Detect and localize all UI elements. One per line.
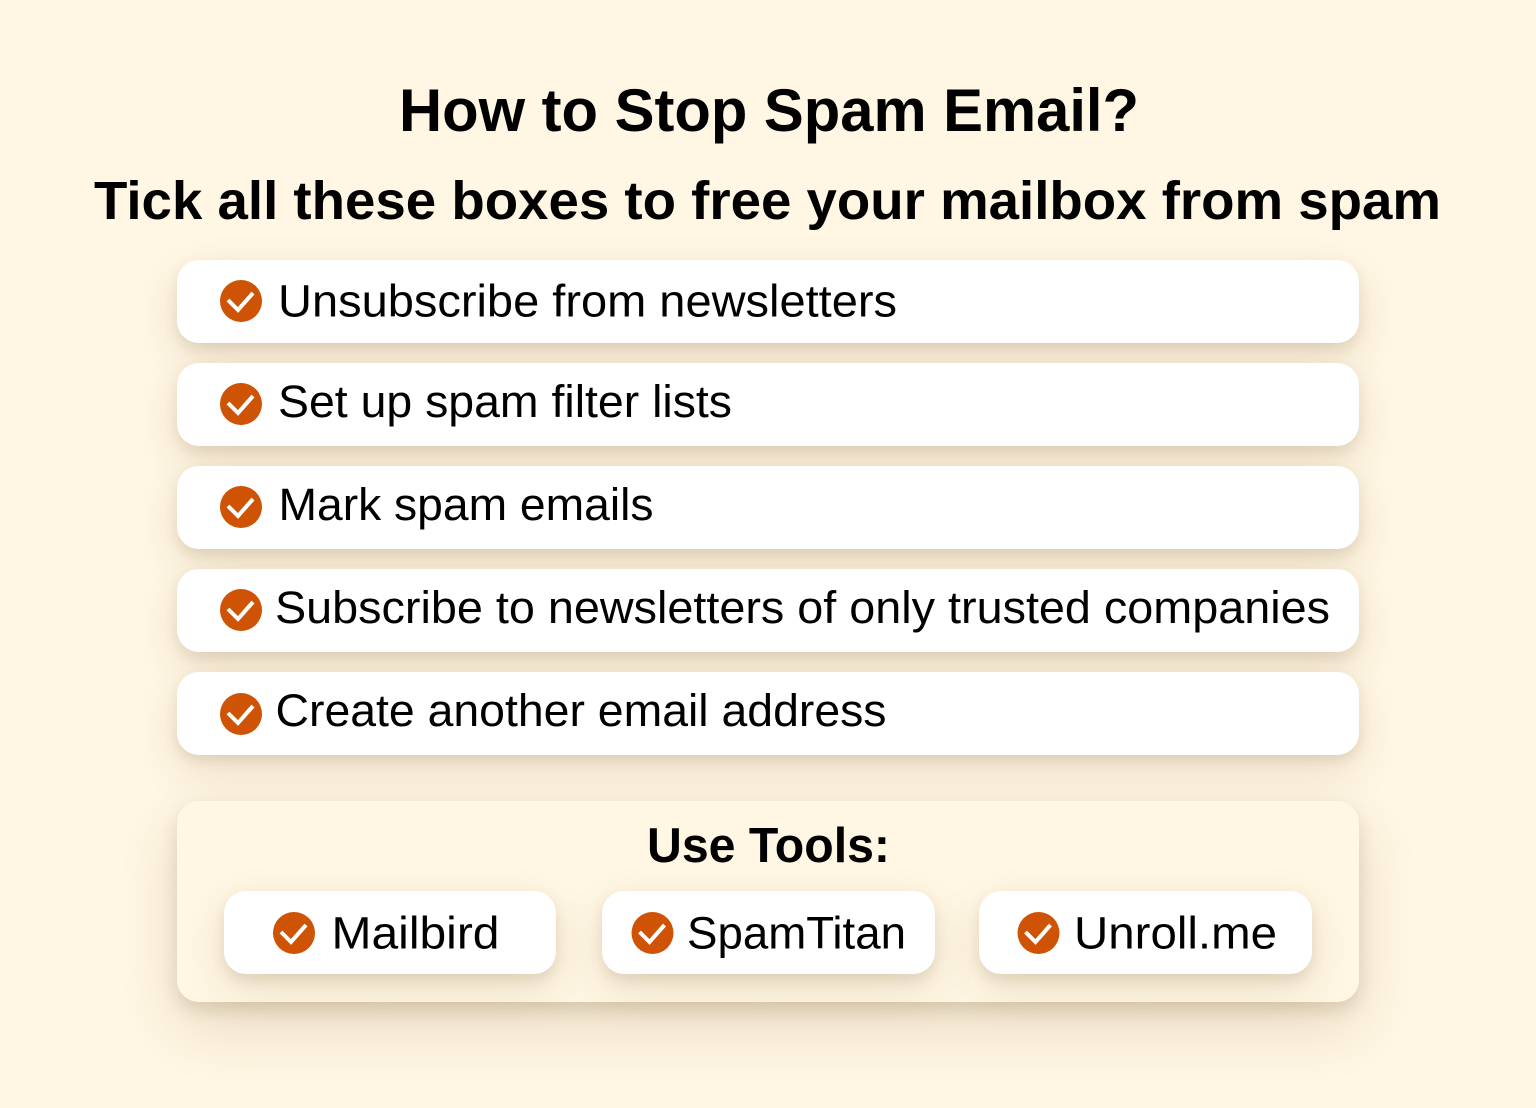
checklist row: mark spam: [177, 466, 1359, 549]
checklist row: unsubscribe: [177, 260, 1359, 343]
label: spam filter: Set up spam filter lists: [278, 376, 732, 427]
label: unroll.me: Unroll.me: [1074, 908, 1277, 958]
checklist row: spam filter: [177, 363, 1359, 446]
icon: check circle: [220, 693, 262, 735]
subtitle: Tick all these boxes to free your mailbox from spam: [94, 171, 1441, 231]
tool chip: unroll.me: [979, 891, 1312, 974]
label: another address: Create another email address: [276, 685, 886, 736]
title: How to Stop Spam Email?: [399, 77, 1139, 144]
tool chip: mailbird: [224, 891, 556, 974]
checklist row: trusted newsletters: [177, 569, 1359, 652]
panel: use tools: [177, 801, 1359, 1002]
icon: check circle: [220, 383, 262, 425]
label: trusted newsletters: Subscribe to newsletters of only trusted companies: [275, 582, 1330, 633]
icon: check circle: [1018, 912, 1060, 954]
label: unsubscribe: Unsubscribe from newsletters: [278, 276, 897, 326]
checklist row: another address: [177, 672, 1359, 755]
icon: check circle: [220, 486, 262, 528]
tool chip: spamtitan: [602, 891, 935, 974]
icon: check circle: [273, 912, 315, 954]
heading: use tools: Use Tools:: [647, 819, 890, 873]
label: spamtitan: SpamTitan: [687, 908, 906, 958]
label: mailbird: Mailbird: [332, 908, 500, 958]
icon: check circle: [220, 280, 262, 322]
label: mark spam: Mark spam emails: [278, 479, 654, 530]
icon: check circle: [220, 589, 262, 631]
icon: check circle: [632, 912, 674, 954]
